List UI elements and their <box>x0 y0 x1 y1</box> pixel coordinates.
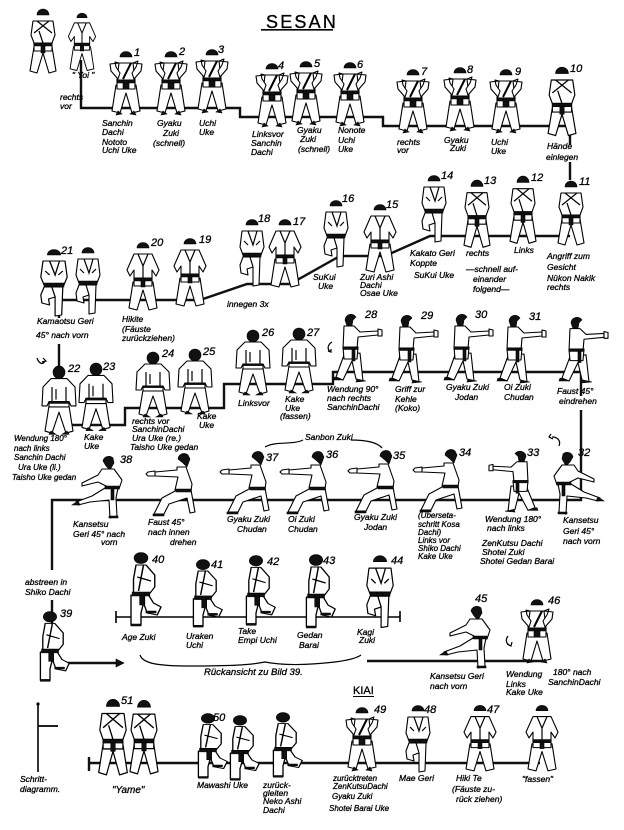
captions row 4: Jodan <box>363 522 387 532</box>
captions row 1: Uke <box>199 127 214 137</box>
captions row 2: (Fäuste <box>122 324 151 334</box>
captions row 3: Griff zur <box>395 384 425 394</box>
pose 39 <box>40 608 72 681</box>
pose 8 <box>444 64 476 131</box>
captions row 1: Gyaku <box>157 118 182 128</box>
captions row 5: SanchinDachi <box>548 677 602 687</box>
pose 26 <box>236 327 275 395</box>
captions row 5: Gedan <box>297 630 323 640</box>
captions row 3: SanchinDachi <box>327 402 381 412</box>
pose 25 <box>178 346 216 414</box>
captions row 2: —schnell auf- <box>466 264 518 274</box>
pose 46: 46 <box>548 595 561 607</box>
pose 30: 30 <box>475 309 488 321</box>
pose 1 <box>110 47 142 115</box>
pose 10: 10 <box>570 63 583 75</box>
pose 48: 48 <box>424 704 437 716</box>
captions row 2: Zuri Ashi <box>360 272 393 282</box>
captions row 4: (Überseta- <box>418 511 456 520</box>
captions row 4: Dachi) <box>418 528 441 537</box>
captions row 3: eindrehen <box>559 396 597 406</box>
captions row 2: Dachi <box>360 280 383 290</box>
captions row 1: Uchi <box>199 118 216 128</box>
captions row 7: zurücktreten <box>333 774 377 783</box>
pose 3 <box>196 44 228 113</box>
captions row 2: 45° nach vorn <box>36 330 89 340</box>
pose 50 <box>198 712 302 780</box>
captions row 1: Uke <box>338 144 353 154</box>
pose 33: 33 <box>527 447 540 459</box>
step diagram lines <box>52 60 581 771</box>
captions row 7: gleiten <box>263 788 288 798</box>
captions row 4: Shotei Gedan Barai <box>480 556 555 566</box>
pose: Faust eindrehen <box>559 317 608 383</box>
captions row 2: SuKui Uke <box>414 270 454 280</box>
captions row 2: zurückziehen) <box>121 333 175 343</box>
pose 40: 40 <box>152 554 165 566</box>
legend: Schrittdiagramm: diagramm. <box>20 784 60 794</box>
captions row 3: Gyaku Zuki <box>446 382 489 392</box>
captions row 2: rechts <box>547 282 571 292</box>
captions row 1: Nonote <box>338 125 365 135</box>
pose 36: 36 <box>326 449 339 461</box>
pose 3: 3 <box>218 44 225 56</box>
captions row 4: nach vorn <box>563 536 601 546</box>
captions row 1: Zuki <box>449 143 467 153</box>
pose 18: 18 <box>258 213 271 225</box>
captions row 7: "fassen" <box>522 774 554 784</box>
captions row 5: Kake Uke <box>506 687 543 697</box>
pose 23 <box>79 361 116 431</box>
captions row 7: (Fäuste zu- <box>452 784 495 794</box>
captions row 1: (schnell) <box>153 138 185 148</box>
captions row 3: Kake <box>285 394 304 404</box>
brace: Rückansicht <box>140 655 361 678</box>
captions row 1: Uke <box>491 146 506 156</box>
pose 18 <box>240 213 271 286</box>
captions row 2 <box>36 245 596 343</box>
captions row 1: einlegen <box>546 152 578 162</box>
captions row 3: Uke <box>199 420 214 430</box>
pose 19 <box>174 234 211 306</box>
captions row 3: Kake <box>197 411 216 421</box>
label: Yoi: " Yoi " <box>72 70 95 80</box>
pose 7 <box>397 66 429 133</box>
pose 13: 13 <box>484 175 497 187</box>
captions row 3: Ura Uke (li.) <box>18 463 61 472</box>
captions row 2: Kakato Geri <box>410 248 455 258</box>
captions row 4: Shiko Dachi <box>418 544 461 553</box>
brace: Rückansicht: Rückansicht zu Bild 39. <box>204 667 303 678</box>
captions row 1: Uchi <box>338 135 356 145</box>
pose 21: 21 <box>60 245 73 257</box>
captions row 1: Sanchin <box>251 138 282 148</box>
captions row 2: innegen 3x <box>227 299 269 309</box>
pose 4: 4 <box>278 60 284 72</box>
captions row 1: (schnell) <box>298 144 330 154</box>
captions row 1: Sanchin <box>102 118 133 128</box>
pose 34 <box>413 447 471 512</box>
captions row 3: Linksvor <box>238 398 271 408</box>
label: rechts vor: rechts <box>60 92 83 102</box>
captions row 4: Shiko Dachi <box>25 587 71 597</box>
captions row 2: Nükon Nakik <box>547 273 596 283</box>
captions row 7: rück ziehen) <box>456 794 502 804</box>
arrow: turn at 46 <box>506 636 512 646</box>
captions row 5: Barai <box>299 640 320 650</box>
captions row 3: Kake <box>84 432 103 442</box>
captions row 4: schritt Kosa <box>418 520 460 529</box>
captions row 1 <box>102 118 578 162</box>
captions row 4: Chudan <box>288 524 318 534</box>
captions row 3: Uke <box>84 441 99 451</box>
pose 15 <box>364 199 399 272</box>
pose Faust nach innen <box>146 453 195 516</box>
captions row 4: drehen <box>170 537 197 547</box>
captions row 7: Mawashi Uke <box>197 780 248 790</box>
pose 32: 32 <box>578 447 590 459</box>
captions row 7: Mae Geri <box>399 773 435 783</box>
captions row 2: Osae Uke <box>360 288 398 298</box>
pose 43 <box>306 554 336 628</box>
pose 35: 35 <box>393 450 406 462</box>
captions row 1: rechts <box>397 137 420 147</box>
pose 29 <box>389 310 438 383</box>
pose 40 <box>131 552 165 626</box>
captions row 1: Dachi <box>102 127 125 137</box>
captions row 3: Uke <box>285 403 300 413</box>
captions row 1: vor <box>397 145 410 155</box>
captions row 3: Wendung 90° <box>327 384 378 394</box>
captions row 4: vorn <box>101 537 118 547</box>
pose 42 <box>246 556 279 625</box>
captions row 7: Hiki Te <box>456 773 482 783</box>
captions row 7: "Yame" <box>112 785 145 796</box>
label: rechts vor: vor <box>60 101 73 111</box>
captions row 3: rechts vor <box>132 416 169 426</box>
captions row 5: 180° nach <box>553 667 591 677</box>
pose 47: 47 <box>487 704 500 716</box>
captions row 4: nach links <box>487 523 526 533</box>
pose 38 <box>72 454 133 518</box>
captions row 5: Kagi <box>357 627 374 637</box>
captions row 2: rechts <box>466 248 490 258</box>
captions row 4: Kake Uke <box>418 552 453 561</box>
pose 50: 50 <box>213 712 226 724</box>
pose 2 <box>155 46 187 115</box>
standing figures before start <box>30 9 96 73</box>
pose 49: 49 <box>374 704 386 716</box>
captions row 3 <box>12 382 597 482</box>
pose 22 <box>42 363 80 434</box>
captions row 2: Uke <box>318 281 333 291</box>
arrow: turn right <box>328 342 332 352</box>
captions row 5: Uchi <box>186 640 204 650</box>
pose 39: 39 <box>60 608 72 620</box>
pose 41: 41 <box>211 559 223 571</box>
pose 14 <box>422 170 453 242</box>
captions row 2: Kamaotsu Geri <box>37 316 94 326</box>
pose 5: 5 <box>314 58 321 70</box>
pose 19: 19 <box>199 234 211 246</box>
captions row 5: Age Zuki <box>121 632 157 642</box>
pose 44: 44 <box>391 555 403 567</box>
pose 24 <box>136 348 174 417</box>
captions row 5: Kansetsu Geri <box>430 671 484 681</box>
captions row 4: Gyaku Zuki <box>354 512 397 522</box>
pose 45 <box>440 593 490 668</box>
pose 49 <box>346 704 386 771</box>
captions row 1: Uchi <box>491 137 508 147</box>
pose 41 <box>193 559 223 627</box>
pose 21 <box>41 245 100 316</box>
captions row 3: nach links <box>14 444 50 453</box>
Sanbon Zuki bracket: Sanbon Zuki <box>305 432 354 442</box>
pose 36 <box>280 449 339 514</box>
pose 37: 37 <box>266 452 279 464</box>
kiai label: KIAI <box>353 685 374 697</box>
pose 34: 34 <box>459 447 471 459</box>
captions row 7: zurück- <box>263 780 291 790</box>
captions row 5: nach vorn <box>430 681 468 691</box>
pose 37 <box>220 451 279 514</box>
captions row 4: ZenKutsu Dachi <box>482 538 542 548</box>
pose 17 <box>269 216 306 287</box>
captions row 7: Neko Ashi <box>263 796 303 806</box>
captions row 1: Zuki <box>299 134 317 144</box>
captions row 3: Sanchin Dachi <box>14 453 66 462</box>
captions row 5: Uraken <box>186 631 213 641</box>
captions row 4: Geri 45° nach <box>73 529 125 539</box>
captions row 1: Gyaku <box>444 135 469 145</box>
pose 31: 31 <box>529 311 541 323</box>
captions row 5: Wendung <box>506 669 542 679</box>
title: SESAN <box>266 12 338 32</box>
captions row 2: Links <box>514 245 535 255</box>
captions row 3: Oi Zuki <box>504 382 531 392</box>
pose 42: 42 <box>267 556 279 568</box>
captions row 7 <box>112 773 554 815</box>
captions row 4: abstreen in <box>25 577 67 587</box>
pose 22: 22 <box>67 363 80 375</box>
pose 12 <box>510 172 543 243</box>
pose 14: 14 <box>441 170 453 182</box>
captions row 5: Take <box>238 626 256 636</box>
captions row 3: Chudan <box>504 392 534 402</box>
captions row 2: Angriff zum <box>547 251 590 261</box>
Sanbon Zuki bracket <box>265 432 382 448</box>
pose 32 <box>554 447 604 514</box>
pose 2: 2 <box>178 46 185 58</box>
captions row 3: Faust 45° <box>557 386 593 396</box>
pose 23: 23 <box>102 361 116 373</box>
captions row 4: nach innen <box>148 527 190 537</box>
captions row 4: Chudan <box>237 524 267 534</box>
captions row 3: Taisho Uke gedan <box>12 473 77 482</box>
captions row 7: Dachi <box>263 805 286 815</box>
captions row 2: Hikite <box>122 314 143 324</box>
captions row 5: Empi Uchi <box>238 635 278 645</box>
legend: Schrittdiagramm <box>20 702 60 794</box>
captions row 2: folgend— <box>473 284 510 294</box>
pose 20 <box>127 237 164 310</box>
pose 25: 25 <box>202 346 216 358</box>
captions row 7: Shotei Barai Uke <box>329 804 390 813</box>
captions row 3: Kehle <box>395 394 417 404</box>
pose 24: 24 <box>161 348 174 360</box>
pose 47 <box>464 704 500 771</box>
captions row 3: nach rechts <box>327 393 372 403</box>
pose 28: 28 <box>364 309 378 321</box>
captions row 3: Ura Uke (re.) <box>132 433 181 443</box>
pose 30 <box>444 309 493 382</box>
captions row 4 <box>25 511 601 597</box>
captions row 2: Gesicht <box>547 262 576 272</box>
pose 8: 8 <box>467 64 474 76</box>
pose 13 <box>464 175 497 247</box>
pose 6 <box>334 59 366 126</box>
pose fassen <box>526 705 558 771</box>
pose 16 <box>324 193 355 267</box>
pose 43: 43 <box>323 555 336 567</box>
pose 38: 38 <box>120 454 133 466</box>
arrow: turn at 32 <box>549 434 560 446</box>
pose 1: 1 <box>134 47 140 59</box>
pose 12: 12 <box>531 172 543 184</box>
captions row 7: ZenKutsuDachi <box>332 782 388 791</box>
captions row 5: Links <box>506 679 527 689</box>
pose 46 <box>521 595 561 663</box>
pose 33 <box>489 447 540 512</box>
pose 20: 20 <box>150 237 164 249</box>
pose 9 <box>490 66 522 133</box>
legend: Schrittdiagramm: Schritt- <box>20 774 47 784</box>
pose 17: 17 <box>293 216 306 228</box>
pose 28 <box>333 309 382 382</box>
captions row 3: Wendung 180° <box>14 434 67 443</box>
pose 5 <box>290 58 322 125</box>
captions row 4: Wendung 180° <box>485 514 541 524</box>
pose 27 <box>282 327 320 393</box>
pose 31 <box>497 311 546 383</box>
arrow: turn left <box>37 358 46 363</box>
captions row 4: Faust 45° <box>148 517 184 527</box>
captions row 5 <box>121 626 602 697</box>
pose 27: 27 <box>306 327 320 339</box>
pose 7: 7 <box>421 66 428 78</box>
captions row 1: Gyaku <box>297 125 322 135</box>
pose 11 <box>558 176 590 245</box>
captions row 3: Taisho Uke gedan <box>130 442 198 452</box>
captions row 4: Gyaku Zuki <box>227 514 270 524</box>
pose 4 <box>256 60 288 127</box>
pose 45: 45 <box>475 593 488 605</box>
captions row 3: SanchinDachi <box>132 424 186 434</box>
pose 10 <box>548 63 583 136</box>
captions row 2: SuKui <box>313 272 336 282</box>
captions row 3: (fassen) <box>280 411 311 421</box>
pose 11: 11 <box>579 176 590 188</box>
captions row 4: Oi Zuki <box>288 514 315 524</box>
pose 16: 16 <box>342 193 355 205</box>
captions row 1: Dachi <box>251 147 274 157</box>
captions row 2: Koppte <box>410 258 437 268</box>
captions row 7: Gyaku Zuki <box>332 792 373 801</box>
captions row 3: (Koko) <box>395 403 420 413</box>
captions row 4: Geri 45° <box>563 526 595 536</box>
captions row 4: Kansetsu <box>73 519 108 529</box>
captions row 3: Jodan <box>454 392 478 402</box>
pose 15: 15 <box>386 199 399 211</box>
pose 29: 29 <box>420 310 433 322</box>
pose 51 <box>99 695 158 775</box>
pose 44 <box>367 555 403 628</box>
pose 26: 26 <box>261 327 275 339</box>
captions row 1: Linksvor <box>252 129 284 139</box>
captions row 4: Kansetsu <box>563 515 598 525</box>
captions row 4: Links vor <box>418 536 450 545</box>
pose 51: 51 <box>121 695 133 707</box>
pose 9: 9 <box>515 66 521 78</box>
pose 6: 6 <box>357 59 364 71</box>
pose 48 <box>406 704 437 772</box>
captions row 1: Zuki <box>162 128 180 138</box>
captions row 1: Nototo <box>102 137 127 147</box>
captions row 1: Uchi Uke <box>102 145 137 155</box>
pose 35 <box>348 450 406 513</box>
captions row 5: Zuki <box>358 635 376 645</box>
captions row 1: Hände <box>547 141 572 151</box>
captions row 4: Shotei Zuki <box>482 547 526 557</box>
captions row 2: einander <box>473 274 507 284</box>
